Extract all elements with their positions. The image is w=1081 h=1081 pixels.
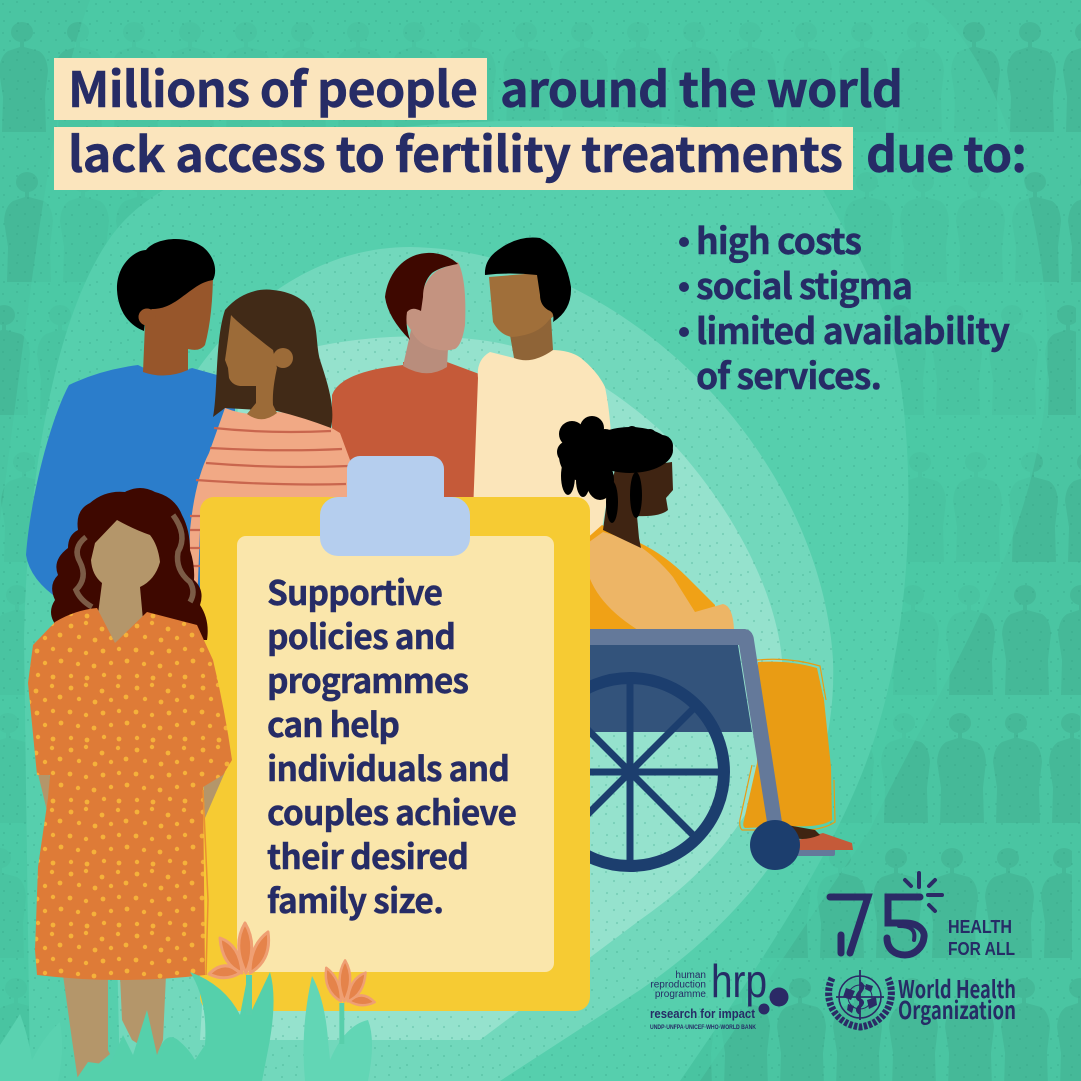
heading: around the world <box>500 51 903 121</box>
logo: 75 Health for All: HEALTH <box>948 917 1012 937</box>
clipboard text: Supportive <box>267 566 443 615</box>
head and hair <box>603 462 673 548</box>
logo: HRP research for impact: hrp <box>711 955 767 1007</box>
flower: large <box>209 923 269 1015</box>
logo: World Health Organization <box>829 970 1016 1027</box>
heading <box>54 51 1027 190</box>
logo: World Health Organization: World Health <box>898 970 1016 1005</box>
torso <box>585 525 715 640</box>
clipboard text <box>267 566 517 923</box>
clipboard text: their desired <box>267 830 469 879</box>
clipboard text: policies and <box>267 610 456 659</box>
logo: HRP research for impact: programme <box>655 989 706 1000</box>
bullet list of barriers <box>679 214 1010 400</box>
person: man in blue sweater <box>26 239 235 690</box>
person: man in cream top <box>472 238 612 540</box>
clipboard <box>200 456 590 1011</box>
wheelchair frame <box>585 645 752 732</box>
bullet list of barriers: social stigma <box>696 259 913 310</box>
person: woman in orange dotted dress <box>28 488 232 1081</box>
logo: HRP research for impact: UNDP·UNFPA·UNICEF·WHO·WORLD BANK <box>650 1025 757 1031</box>
heading: due to: <box>866 116 1027 186</box>
logo: 75 Health for All: FOR ALL <box>948 939 1015 959</box>
clipboard text: couples achieve <box>267 786 517 835</box>
logo: 75 Health for All <box>830 873 1015 959</box>
bullet list of barriers: of services. <box>696 349 882 400</box>
person: woman in striped sweater <box>190 290 352 680</box>
logo: HRP research for impact: human <box>675 970 706 981</box>
clipboard text: programmes <box>267 654 469 703</box>
clipboard text: individuals and <box>267 742 510 791</box>
grass and flowers <box>0 923 375 1081</box>
person: man in terracotta top <box>332 253 490 510</box>
flower: small <box>326 960 375 1044</box>
person: woman in wheelchair <box>536 416 853 870</box>
logo: HRP research for impact: research for impact <box>650 1006 756 1021</box>
logo: World Health Organization: Organization <box>898 991 1016 1026</box>
clipboard clip <box>320 456 470 556</box>
bullet list of barriers: high costs <box>696 214 862 265</box>
clipboard text: family size. <box>267 874 444 923</box>
clipboard text: can help <box>267 698 400 747</box>
trousers <box>743 662 832 828</box>
logo: HRP research for impact <box>650 955 788 1031</box>
heading: lack access to fertility treatments <box>68 116 843 186</box>
heading: Millions of people <box>68 51 478 121</box>
WHO emblem <box>829 970 891 1027</box>
logo: HRP research for impact: reproduction <box>650 980 706 990</box>
bullet list of barriers: limited availability <box>696 304 1010 355</box>
